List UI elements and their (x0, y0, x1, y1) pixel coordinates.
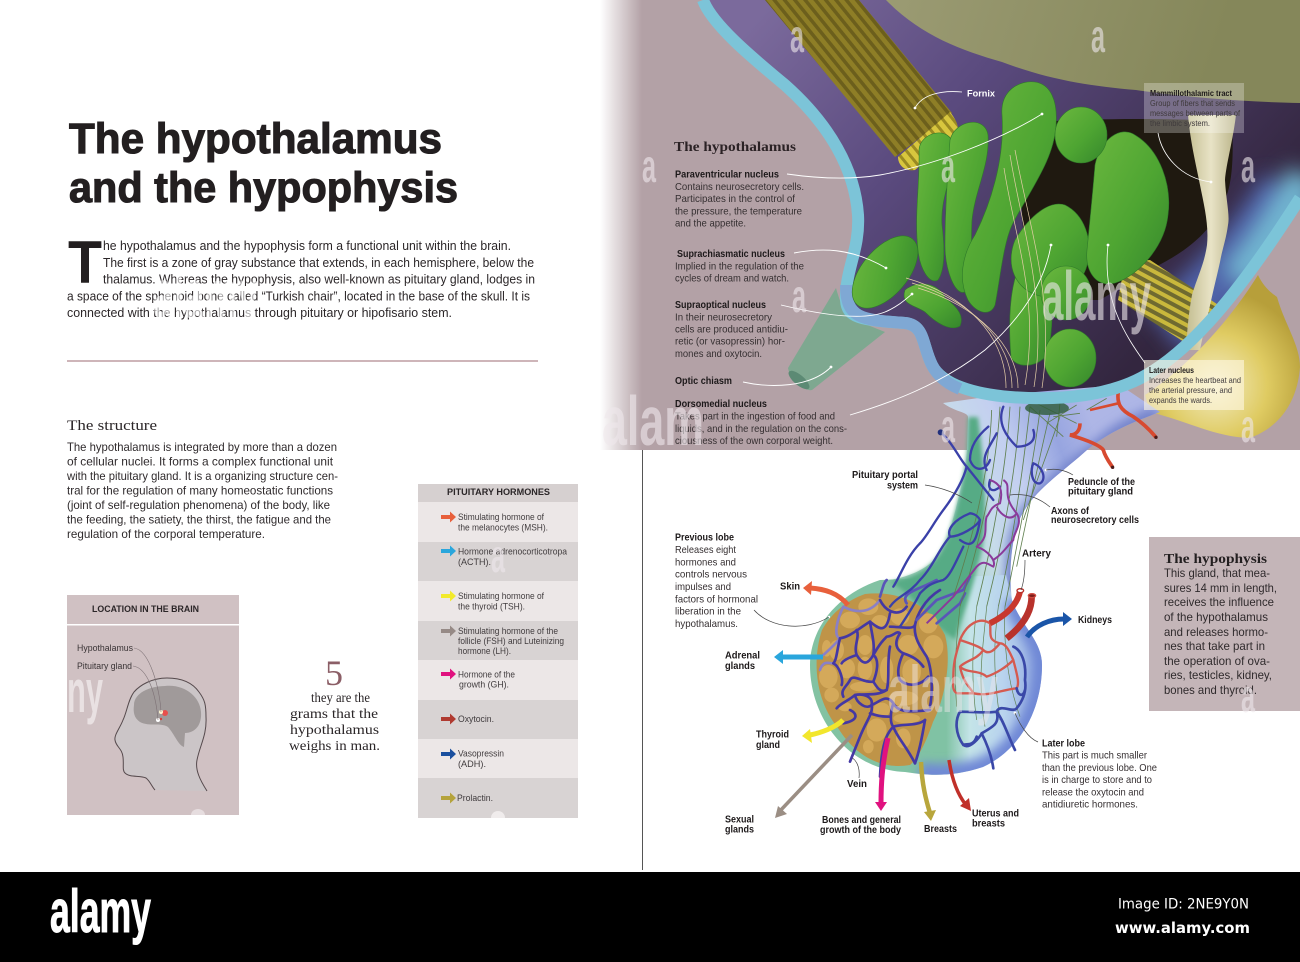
text block: the structure: the feeding, the satiety, the thirst, the fatigue and the (67, 512, 331, 526)
label: previous lobe: factors of hormonal (675, 594, 758, 606)
label: vein: Vein (847, 779, 867, 790)
label: axons of neurosecretory cells: Axons of (1051, 506, 1090, 517)
label: previous lobe: Previous lobe (675, 532, 734, 544)
label: pituitary portal system (852, 470, 972, 503)
label: previous lobe: impulses and (675, 581, 731, 593)
supraoptical nucleus (675, 293, 913, 360)
arrow: kidneys (1027, 612, 1072, 637)
row: ACTH (441, 546, 568, 567)
footer logo: alamy (50, 878, 151, 945)
suprachiasmatic nucleus: cycles of dream and watch. (675, 272, 789, 284)
panel body: bones and thyroid. (1164, 683, 1257, 697)
red capillary network (953, 589, 1036, 694)
text block: the structure: (joint of self-regulation phenomena) of the body, like (67, 498, 330, 512)
row: oxytocin: Oxytocin. (458, 714, 494, 724)
label: sexual glands (725, 814, 754, 836)
dorsomedial nucleus: liquids, and in the regulation on the cons- (675, 423, 847, 435)
callout: later nucleus (1107, 244, 1244, 410)
label: later lobe: is in charge to store and to (1042, 774, 1152, 786)
blue glow along right membrane (1165, 175, 1300, 330)
watermarks: a (1241, 400, 1255, 452)
label: adrenal glands: Adrenal (725, 650, 760, 662)
label: fornix (914, 88, 996, 109)
label: previous lobe: Releases eight (675, 544, 736, 556)
row: vasopressin: (ADH). (458, 759, 486, 769)
watermarks: a (941, 140, 955, 192)
label: later lobe: Later lobe (1042, 738, 1085, 750)
suprachiasmatic nucleus: Suprachiasmatic nucleus (677, 248, 785, 260)
watermarks: alamy (888, 652, 998, 726)
gold tissue cells (819, 598, 943, 753)
label: previous lobe: liberation in the (675, 606, 741, 618)
label: uterus and breasts: breasts (972, 818, 1005, 830)
label: vein (847, 758, 867, 790)
text block: the structure: regulation of the corporal temperature. (67, 527, 265, 541)
intro text block with drop cap: connected with the hypothalamus through pituitary or hipofisario stem. (67, 305, 452, 320)
supraoptical nucleus: cells are produced antidiu- (675, 324, 788, 336)
label: artery: Artery (1022, 548, 1051, 560)
text block: the structure (66, 440, 338, 541)
label: previous lobe: hormones and (675, 556, 736, 568)
icon: head profile (115, 678, 207, 791)
row: FSH and LH: hormone (LH). (458, 646, 511, 656)
stalk veins (890, 407, 1043, 627)
paraventricular nucleus (675, 113, 1043, 230)
label: bones and general growth of the body: growth of the body (820, 825, 901, 836)
row: vasopressin (441, 748, 504, 769)
optic chiasm (675, 366, 832, 387)
label: bones and general growth of the body: Bones and general (822, 815, 901, 826)
arrow: skin (803, 581, 848, 605)
watermarks: alamy (1042, 257, 1151, 335)
optic chiasm: Optic chiasm (675, 375, 732, 387)
label: peduncle of the pituitary gland: Peduncle of the (1068, 477, 1135, 488)
panel body: receives the influence (1164, 595, 1274, 609)
label: later lobe: This part is much smaller (1042, 750, 1147, 762)
supraoptical nucleus: In their neurosecretory (675, 312, 773, 324)
label: adrenal glands (725, 650, 760, 672)
paraventricular nucleus: Contains neurosecretory cells. (675, 181, 804, 193)
intro text block with drop cap (67, 229, 535, 320)
callout: mammillothalamic tract: Group of fibers that sends (1150, 98, 1235, 108)
panel text: the hypothalamus nuclei (674, 113, 1052, 447)
gland bulb (810, 575, 1042, 775)
watermarks: a (642, 140, 656, 192)
callout: later nucleus: expands the wards. (1149, 395, 1212, 405)
green stalk core (890, 417, 985, 640)
label: peduncle of the pituitary gland: pituitary gland (1068, 486, 1133, 498)
fibre tuft (1025, 401, 1069, 415)
watermarks: a (491, 530, 505, 582)
label: uterus and breasts: Uterus and (972, 808, 1019, 820)
footer bar (0, 872, 1300, 962)
intro text block with drop cap: T (68, 229, 102, 296)
suprachiasmatic nucleus: Implied in the regulation of the (675, 260, 804, 272)
purple tissue (703, 0, 1300, 398)
dorsomedial nucleus (675, 244, 1052, 447)
row: TSH: Stimulating hormone of (458, 591, 544, 601)
row: prolactin: Prolactin. (457, 793, 493, 803)
label: bones and general growth of the body (820, 815, 901, 836)
panel: location in the brain (67, 595, 239, 815)
label: later lobe (1015, 713, 1157, 810)
label: adrenal glands: glands (725, 661, 755, 672)
label: later lobe: release the oxytocin and (1042, 786, 1144, 798)
row: FSH and LH: Stimulating hormone of the (458, 626, 558, 636)
row: GH: Hormone of the (458, 670, 515, 680)
illustration: hypothalamus background tissue (703, 0, 1300, 438)
row: ACTH: (ACTH). (458, 557, 491, 567)
title (69, 115, 458, 212)
panel body: sures 14 mm in length, (1164, 581, 1277, 595)
title: The hypothalamus (69, 115, 442, 163)
label: previous lobe (675, 532, 829, 630)
intro text block with drop cap: The first is a zone of gray substance that extends, in each hemisphere, below the (103, 255, 534, 270)
intro text block with drop cap: thalamus. Whereas the hypophysis, also well-known as pituitary gland, lodges in (103, 272, 535, 286)
panel: pituitary hormones table (418, 484, 578, 818)
label: pituitary gland: Pituitary gland (77, 661, 132, 671)
label: hypothalamus: Hypothalamus (77, 643, 133, 653)
green axons (953, 398, 1107, 727)
watermarks: a (1241, 670, 1255, 722)
neurosecretory purple network (927, 480, 1019, 623)
portal vein network (820, 577, 970, 777)
callout: later nucleus: Increases the heartbeat and (1149, 375, 1241, 385)
arrow: uterus and breasts (949, 760, 971, 811)
callout: mammillothalamic tract: the limbic system. (1150, 118, 1210, 128)
footer image id: Image ID: 2NE9Y0N (1118, 896, 1249, 912)
callout: mammillothalamic tract: messages between parts of (1150, 108, 1241, 118)
callout: later nucleus: the arterial pressure, and (1149, 385, 1232, 395)
text block: the structure: with the pituitary gland. It is a organizing structure cen- (66, 469, 338, 483)
label: previous lobe: controls nervous (675, 568, 747, 580)
arrow: thyroid gland (802, 720, 843, 743)
gland neck (870, 385, 1160, 600)
red artery at stalk top (1070, 392, 1158, 469)
label: pituitary portal system: Pituitary portal (852, 470, 918, 481)
label: hypothalamus (77, 643, 161, 712)
panel body: the operation of ova- (1164, 654, 1270, 668)
row: MSH (441, 512, 548, 532)
label: pituitary portal system: system (887, 480, 918, 492)
optic chiasm tube (788, 288, 885, 390)
label: thyroid gland: Thyroid (756, 730, 789, 740)
label: pituitary gland (77, 661, 158, 720)
fornix column (765, 0, 958, 170)
panel body: This gland, that mea- (1164, 566, 1270, 580)
heading: the structure: The structure (67, 418, 157, 434)
row: MSH: the melanocytes (MSH). (458, 522, 548, 532)
watermarks: a (1241, 140, 1255, 192)
supraoptical nucleus: mones and oxytocin. (675, 348, 762, 360)
callout: 5 grams: hypothalamus (290, 723, 379, 738)
heading: The hypothalamus (674, 140, 797, 155)
label: thyroid gland (756, 730, 789, 751)
label: kidneys: Kidneys (1078, 615, 1112, 626)
callout: 5 grams: 5 (325, 653, 343, 693)
supraoptical nucleus: Supraoptical nucleus (675, 299, 766, 311)
watermarks: a (792, 270, 806, 322)
white dot markers (828, 469, 1047, 714)
row: prolactin (441, 792, 493, 804)
table heading: PITUITARY HORMONES (447, 487, 550, 497)
label: sexual glands: Sexual (725, 814, 754, 826)
arrow: adrenal glands (774, 650, 823, 664)
callout: later nucleus: Later nucleus (1149, 365, 1194, 375)
callout: 5 grams: grams that the (290, 707, 378, 722)
row: TSH: the thyroid (TSH). (458, 602, 525, 612)
text block: the structure: of cellular nuclei. It forms a complex functional unit (67, 454, 334, 468)
intro text block with drop cap: a space of the sphenoid bone called “Turkish chair”, located in the base of the skull. It is (67, 288, 530, 304)
row: GH: growth (GH). (459, 680, 509, 690)
watermarks: a (941, 400, 955, 452)
watermarks: a (790, 10, 804, 62)
thalamus mass (886, 0, 1300, 103)
row: ACTH: Hormone adrenocorticotropa (458, 546, 568, 556)
arrow: sexual glands (775, 735, 852, 818)
dorsomedial nucleus: Dorsomedial nucleus (675, 398, 767, 410)
label: fornix: Fornix (967, 88, 996, 100)
watermarks: alamy (153, 255, 258, 333)
footer url: www.alamy.com (1115, 919, 1250, 937)
panel body: of the hypothalamus (1164, 610, 1268, 624)
illustration: membrane and nuclei (703, 0, 1300, 398)
label: previous lobe: hypothalamus. (675, 618, 738, 630)
text block: the structure: The hypothalamus is integrated by more than a dozen (67, 440, 337, 454)
title: and the hypophysis (69, 164, 458, 212)
suprachiasmatic nucleus (675, 248, 887, 284)
row: MSH: Stimulating hormone of (458, 512, 544, 522)
label: later lobe: antidiuretic hormones. (1042, 798, 1138, 810)
paraventricular nucleus: Paraventricular nucleus (675, 168, 779, 180)
label: uterus and breasts (972, 808, 1019, 830)
paraventricular nucleus: and the appetite. (675, 218, 746, 230)
dark cavity (1022, 119, 1233, 300)
label: later lobe: than the previous lobe. One (1042, 762, 1157, 774)
anterior lobe gold tissue (817, 593, 948, 766)
watermarks (153, 10, 1255, 726)
row: GH (441, 668, 515, 690)
panel body: ries, testicles, kidney, (1164, 668, 1272, 682)
panel: the hypophysis (1149, 537, 1300, 711)
row: FSH and LH (441, 626, 564, 656)
intro text block with drop cap: he hypothalamus and the hypophysis form a functional unit within the brain. (103, 238, 511, 253)
cyan membrane band (703, 0, 1300, 398)
dorsomedial nucleus: ciousness of the own corporal weight. (675, 435, 833, 447)
label: axons of neurosecretory cells: neurosecretory cells (1051, 515, 1139, 526)
mammillothalamic tract (1186, 115, 1236, 350)
text block: the structure: tral for the regulation of many homeostatic functions (67, 484, 333, 498)
callout: mammillothalamic tract: Mammillothalamic tract (1150, 88, 1232, 98)
watermarks: alam (602, 382, 704, 460)
row: TSH (441, 590, 544, 612)
paraventricular nucleus: the pressure, the temperature (675, 206, 802, 218)
callout: 5 grams (289, 653, 380, 754)
illustration background: upper panel (600, 0, 1300, 450)
dorsomedial nucleus: Takes part in the ingestion of food and (675, 410, 835, 422)
label: breasts: Breasts (924, 824, 957, 835)
label: skin: Skin (780, 582, 800, 592)
panel body: and releases hormo- (1164, 625, 1268, 639)
yellow body (1145, 275, 1300, 438)
label: axons of neurosecretory cells (1010, 494, 1139, 526)
illustration: pituitary gland (810, 385, 1160, 777)
nerve fibers (906, 150, 1046, 388)
blue capillary network, posterior lobe (957, 647, 1025, 768)
arrow: breasts (921, 762, 936, 821)
label: peduncle of the pituitary gland (1046, 469, 1135, 498)
label: artery (1021, 548, 1051, 590)
lower fornix fibers (1118, 260, 1217, 340)
row: vasopressin: Vasopressin (458, 748, 504, 758)
watermark fragment: ny (67, 658, 103, 725)
watermarks: a (1091, 10, 1105, 62)
green nuclei (840, 82, 1169, 387)
callout: mammillothalamic tract (1144, 83, 1244, 183)
arrow: bones and growth (875, 738, 888, 811)
callout: 5 grams: weighs in man. (289, 739, 380, 754)
callout: 5 grams: they are the (311, 691, 370, 706)
panel body: nes that take part in (1164, 639, 1265, 653)
label: thyroid gland: gland (756, 740, 780, 751)
supraoptical nucleus: retic (or vasopressin) hor- (675, 336, 785, 348)
panel heading: The hypophysis (1164, 552, 1268, 567)
blue membrane segment (846, 285, 960, 389)
panel heading: LOCATION IN THE BRAIN (92, 604, 199, 614)
paraventricular nucleus: Participates in the control of (675, 193, 795, 205)
row: oxytocin (441, 714, 494, 724)
panel body (1164, 566, 1277, 697)
row: FSH and LH: follicle (FSH) and Luteinizing (458, 636, 564, 646)
label: sexual glands: glands (725, 824, 754, 836)
